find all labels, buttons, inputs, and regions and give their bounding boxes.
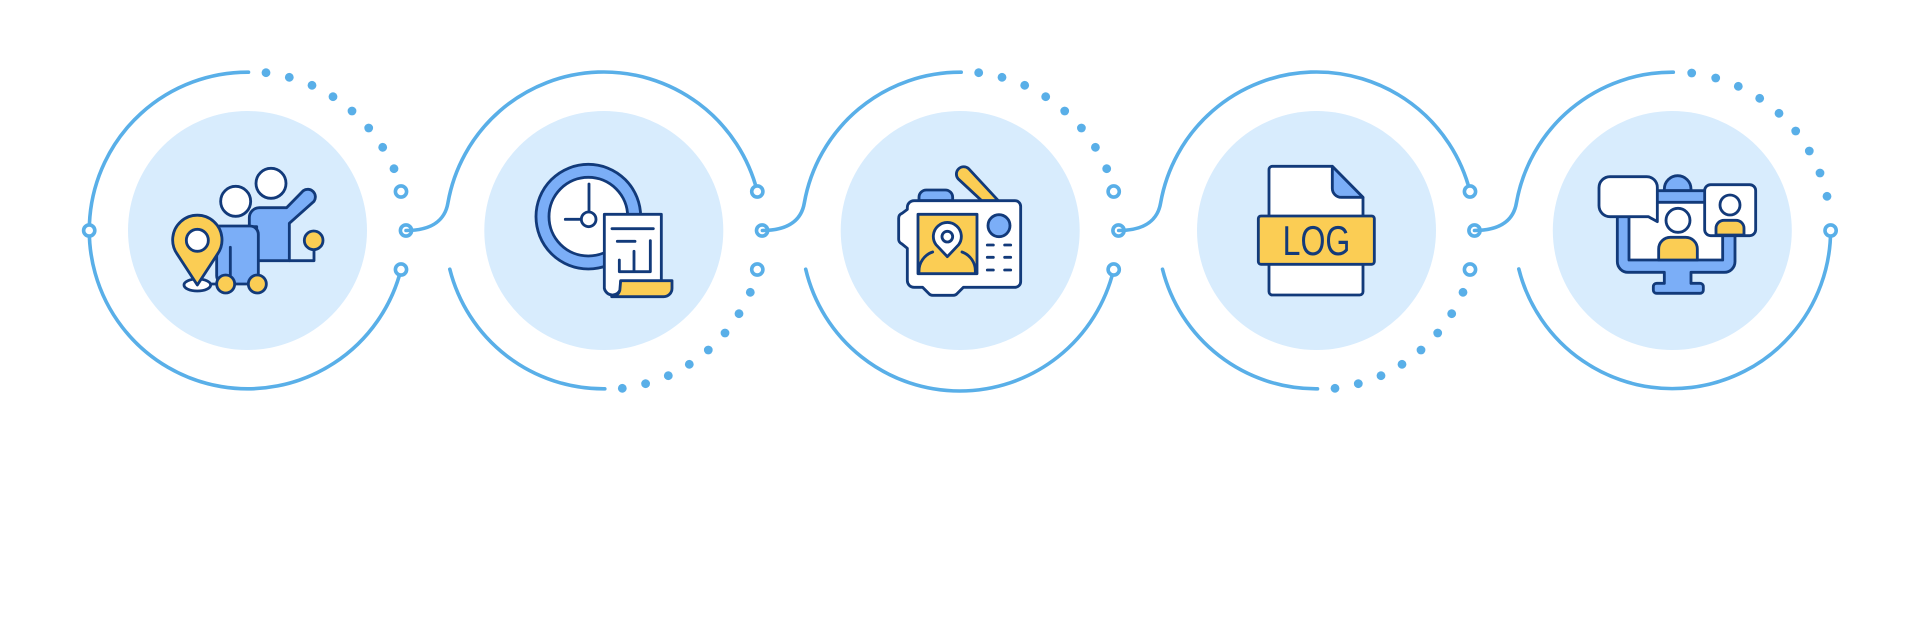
panel: step 1 location and people <box>84 68 412 389</box>
icon: LOG file document: LOG <box>1283 217 1350 264</box>
step 4 ring <box>1119 72 1480 393</box>
panel: step 3 radio <box>762 68 1124 391</box>
icon: people with location pin <box>173 168 323 293</box>
step 5 ring <box>1474 69 1836 389</box>
icon: LOG file document <box>1258 166 1374 295</box>
step 1 ring <box>84 68 412 389</box>
step 3 ring <box>762 68 1124 391</box>
step 2 ring <box>406 72 768 393</box>
panel: step 2 clock and report <box>406 72 768 393</box>
panel: step 5 video call <box>1474 69 1836 389</box>
icon: video conference monitor <box>1599 176 1756 293</box>
panel: step 4 log file <box>1119 72 1480 393</box>
icon: radio with map screen <box>899 167 1021 295</box>
icon: clock and document <box>536 164 672 297</box>
